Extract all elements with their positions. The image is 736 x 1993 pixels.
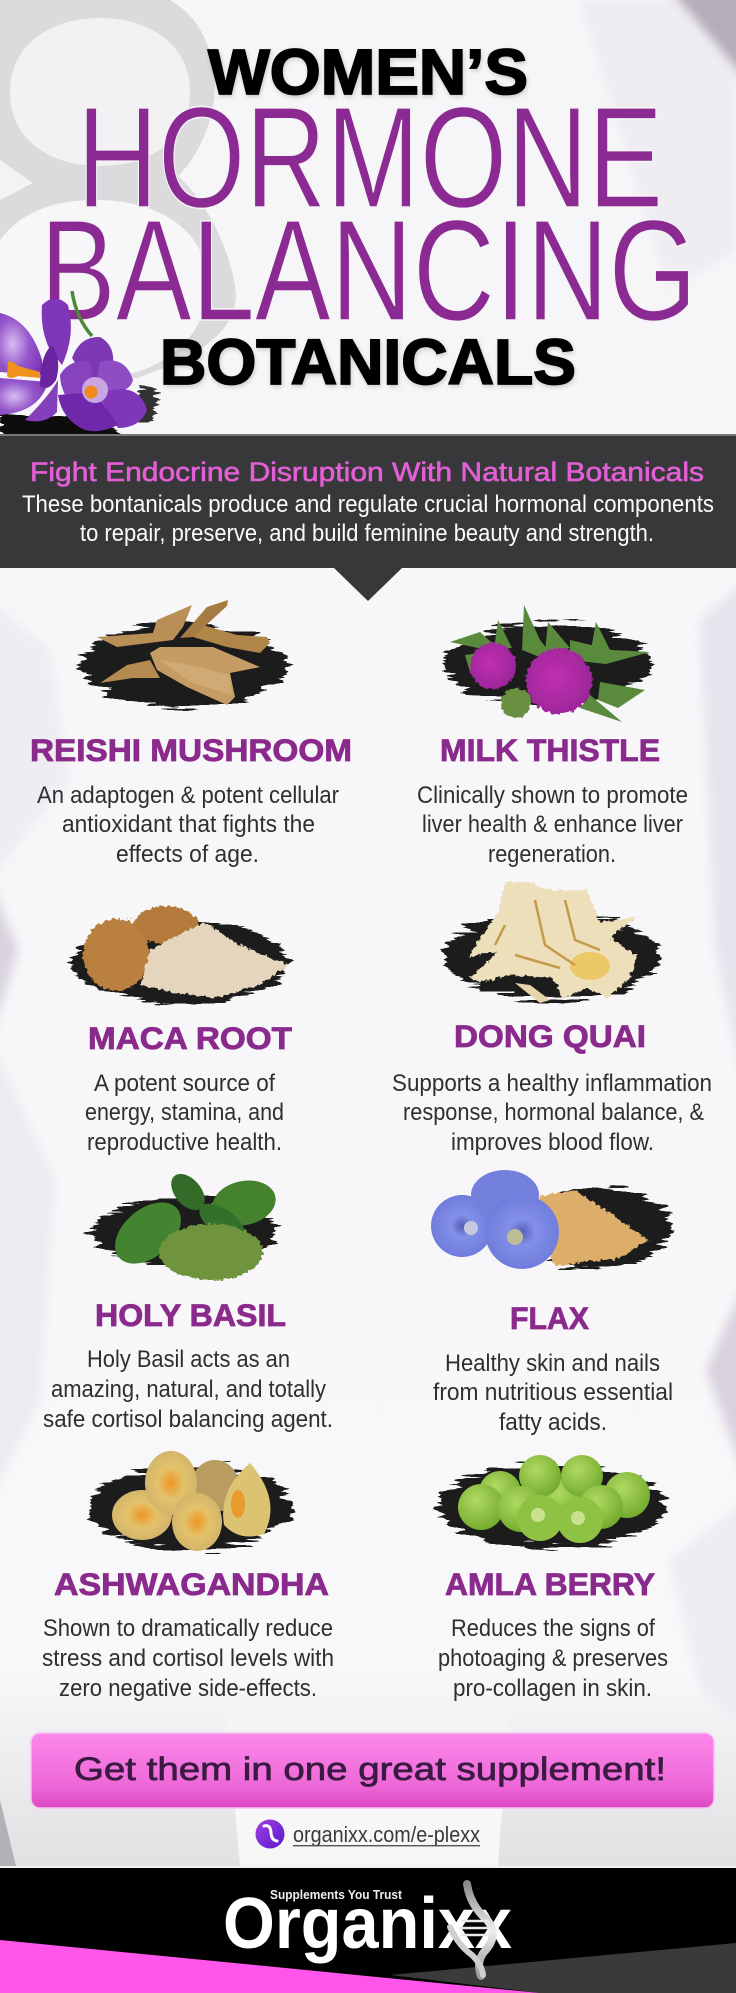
heading: holy basil: HOLY BASIL bbox=[95, 1297, 286, 1333]
description: effects of age. bbox=[116, 841, 259, 868]
footer pink wedge bbox=[0, 1940, 540, 1993]
description bbox=[433, 1350, 673, 1436]
banner text: to repair, preserve, and build feminine beauty and strength. bbox=[80, 520, 654, 547]
title line: Botanicals: BOTANICALS bbox=[160, 326, 576, 398]
image: basil leaves and powder bbox=[92, 1168, 280, 1280]
logo dna bbox=[450, 1884, 493, 1976]
description bbox=[42, 1615, 334, 1702]
link text: organixx.com/e-plexx bbox=[293, 1822, 480, 1847]
panel: maca root bbox=[72, 906, 292, 1156]
description: Supports a healthy inflammation bbox=[392, 1070, 712, 1097]
image: ashwagandha fruit bbox=[88, 1451, 292, 1551]
banner heading: Fight Endocrine Disruption With Natural Botanicals bbox=[30, 457, 704, 487]
footer bbox=[0, 1866, 736, 1993]
logo wordmark: Organixx bbox=[223, 1884, 512, 1964]
callout button: Get them in one great supplement! bbox=[74, 1751, 666, 1787]
image: maca root and powder bbox=[72, 906, 288, 1004]
description: zero negative side-effects. bbox=[59, 1675, 317, 1702]
banner text bbox=[22, 491, 714, 547]
decorative figure 8 bbox=[0, 0, 236, 378]
description bbox=[37, 782, 339, 868]
image: reishi slices bbox=[82, 600, 286, 707]
description: Holy Basil acts as an bbox=[87, 1346, 290, 1373]
description: Clinically shown to promote bbox=[417, 782, 688, 809]
description: Shown to dramatically reduce bbox=[43, 1615, 333, 1642]
description: fatty acids. bbox=[499, 1409, 607, 1436]
title bbox=[40, 36, 697, 398]
description: stress and cortisol levels with bbox=[42, 1645, 334, 1672]
panel: dong quai bbox=[392, 882, 712, 1156]
title line: Women's: WOMEN’S bbox=[208, 36, 528, 108]
heading: maca root: MACA ROOT bbox=[88, 1020, 292, 1056]
description: liver health & enhance liver bbox=[422, 811, 683, 838]
description: safe cortisol balancing agent. bbox=[43, 1406, 333, 1433]
link with icon bbox=[256, 1820, 480, 1848]
panel: intro banner bbox=[0, 434, 736, 601]
description: An adaptogen & potent cellular bbox=[37, 782, 339, 809]
description bbox=[438, 1615, 668, 1702]
description: from nutritious essential bbox=[433, 1379, 673, 1406]
heading: ashwagandha: ASHWAGANDHA bbox=[54, 1566, 329, 1602]
description: regeneration. bbox=[488, 841, 616, 868]
panel: ashwagandha bbox=[42, 1451, 334, 1702]
image: amla berries bbox=[438, 1455, 666, 1548]
panel: milk thistle bbox=[417, 605, 688, 868]
description: photoaging & preserves bbox=[438, 1645, 668, 1672]
image: flax flowers and seeds bbox=[431, 1170, 670, 1269]
logo bbox=[223, 1884, 512, 1976]
panel: amla berry bbox=[438, 1455, 668, 1702]
panel: flax bbox=[431, 1170, 673, 1436]
description bbox=[85, 1070, 284, 1156]
panel: holy basil bbox=[43, 1168, 333, 1433]
description: Healthy skin and nails bbox=[445, 1350, 660, 1377]
description bbox=[392, 1070, 712, 1156]
description: amazing, natural, and totally bbox=[51, 1376, 327, 1403]
heading: flax: FLAX bbox=[510, 1300, 589, 1336]
image: dong quai strips bbox=[443, 882, 659, 1003]
panel: reishi mushroom bbox=[30, 600, 352, 868]
description bbox=[417, 782, 688, 868]
description: A potent source of bbox=[94, 1070, 275, 1097]
heading: dong quai: DONG QUAI bbox=[454, 1018, 646, 1054]
heading: milk thistle: MILK THISTLE bbox=[440, 732, 660, 768]
image: thistle flowers bbox=[444, 605, 652, 722]
description: response, hormonal balance, & bbox=[403, 1099, 704, 1126]
description bbox=[43, 1346, 333, 1433]
description: energy, stamina, and bbox=[85, 1099, 284, 1126]
heading: amla berry: AMLA BERRY bbox=[445, 1566, 655, 1602]
heading: reishi mushroom: REISHI MUSHROOM bbox=[30, 732, 352, 768]
description: antioxidant that fights the bbox=[62, 811, 315, 838]
icon: crocus flowers bbox=[0, 291, 157, 448]
callout button bbox=[31, 1733, 714, 1808]
description: Reduces the signs of bbox=[451, 1615, 655, 1642]
description: improves blood flow. bbox=[451, 1129, 654, 1156]
logo tagline: Supplements You Trust bbox=[270, 1887, 403, 1902]
description: reproductive health. bbox=[87, 1129, 282, 1156]
icon: chain link bbox=[256, 1820, 284, 1848]
description: pro-collagen in skin. bbox=[453, 1675, 652, 1702]
footer grey wedge bbox=[390, 1943, 736, 1993]
